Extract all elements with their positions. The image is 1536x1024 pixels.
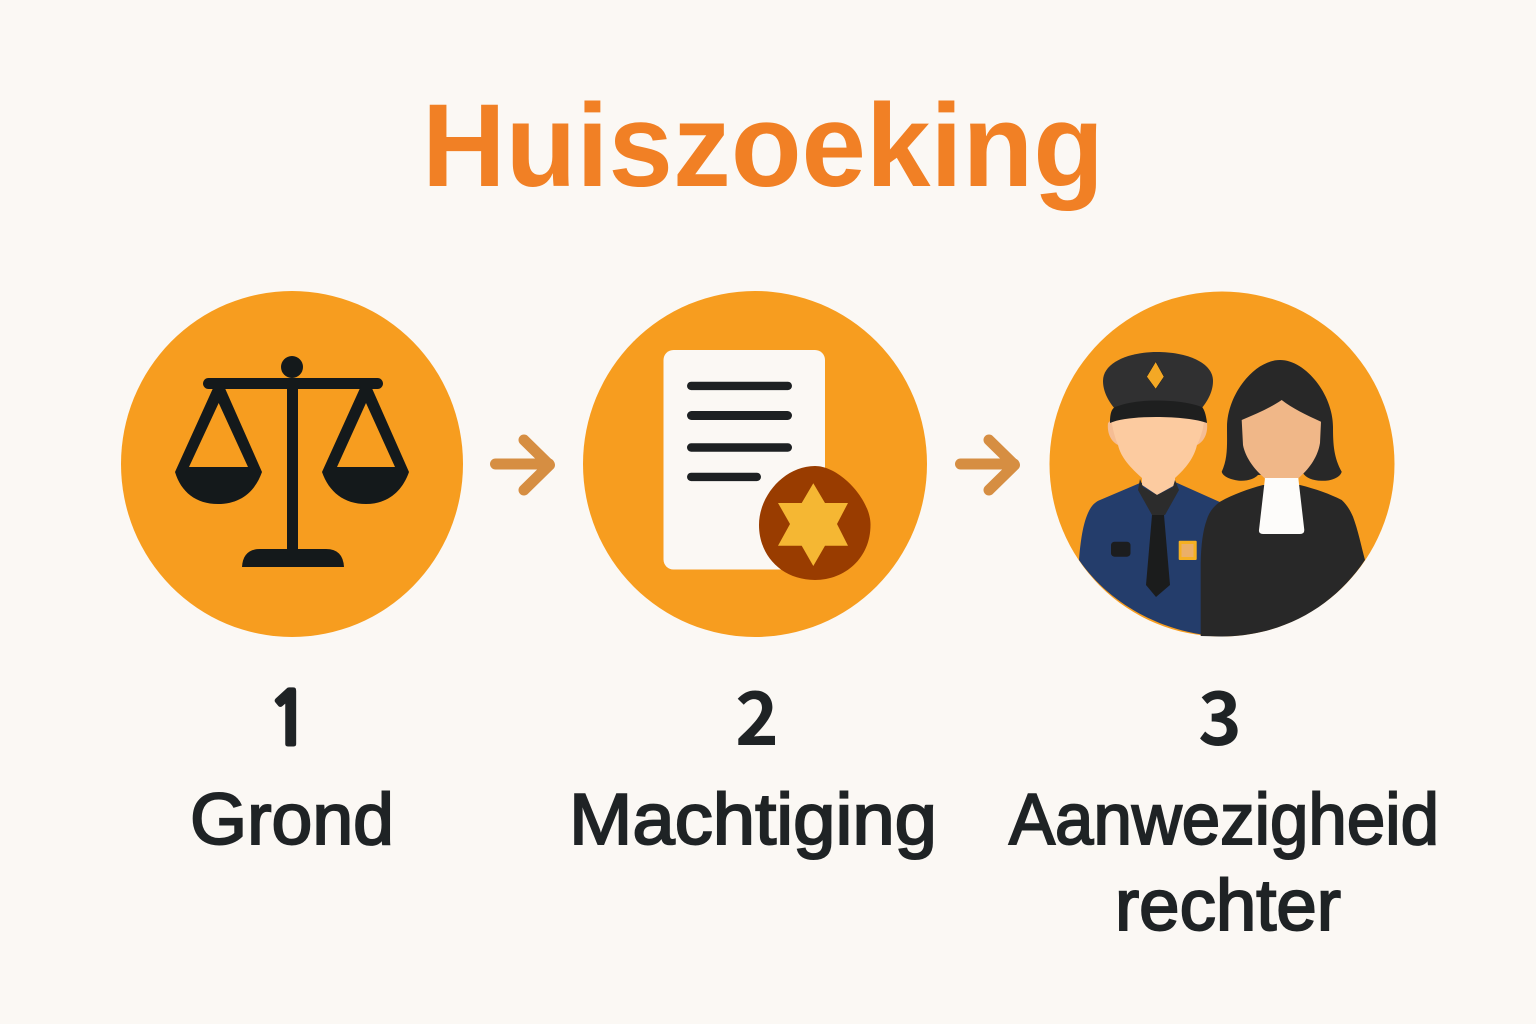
step 2: document icon in circle xyxy=(583,291,927,637)
label step 1 xyxy=(190,684,394,860)
label Machtiging: Machtiging xyxy=(569,780,937,860)
step 1: scales icon in circle xyxy=(121,291,463,637)
icon: judge xyxy=(1201,360,1365,636)
label Grond: Grond xyxy=(190,780,394,860)
label step 3 xyxy=(1009,660,1439,946)
circle 3 xyxy=(1050,292,1394,636)
number 2: 2 xyxy=(735,660,779,767)
icon: police officer xyxy=(1079,352,1222,636)
circle 1 xyxy=(121,291,463,637)
circle 2 xyxy=(583,291,927,637)
number 3: 3 xyxy=(1198,660,1242,767)
number 1: 1 xyxy=(267,684,311,757)
icon: seal with star xyxy=(759,466,871,580)
arrow 1 xyxy=(496,440,550,490)
title: Huiszoeking xyxy=(422,80,1104,212)
icon: scales of justice xyxy=(175,356,409,567)
label rechter: rechter xyxy=(1115,866,1341,946)
arrow 2 xyxy=(960,440,1014,490)
label Aanwezigheid: Aanwezigheid xyxy=(1009,780,1439,860)
label step 2 xyxy=(569,660,937,860)
icon: document xyxy=(664,350,825,570)
step 3: officer and judge in circle xyxy=(1050,292,1394,636)
